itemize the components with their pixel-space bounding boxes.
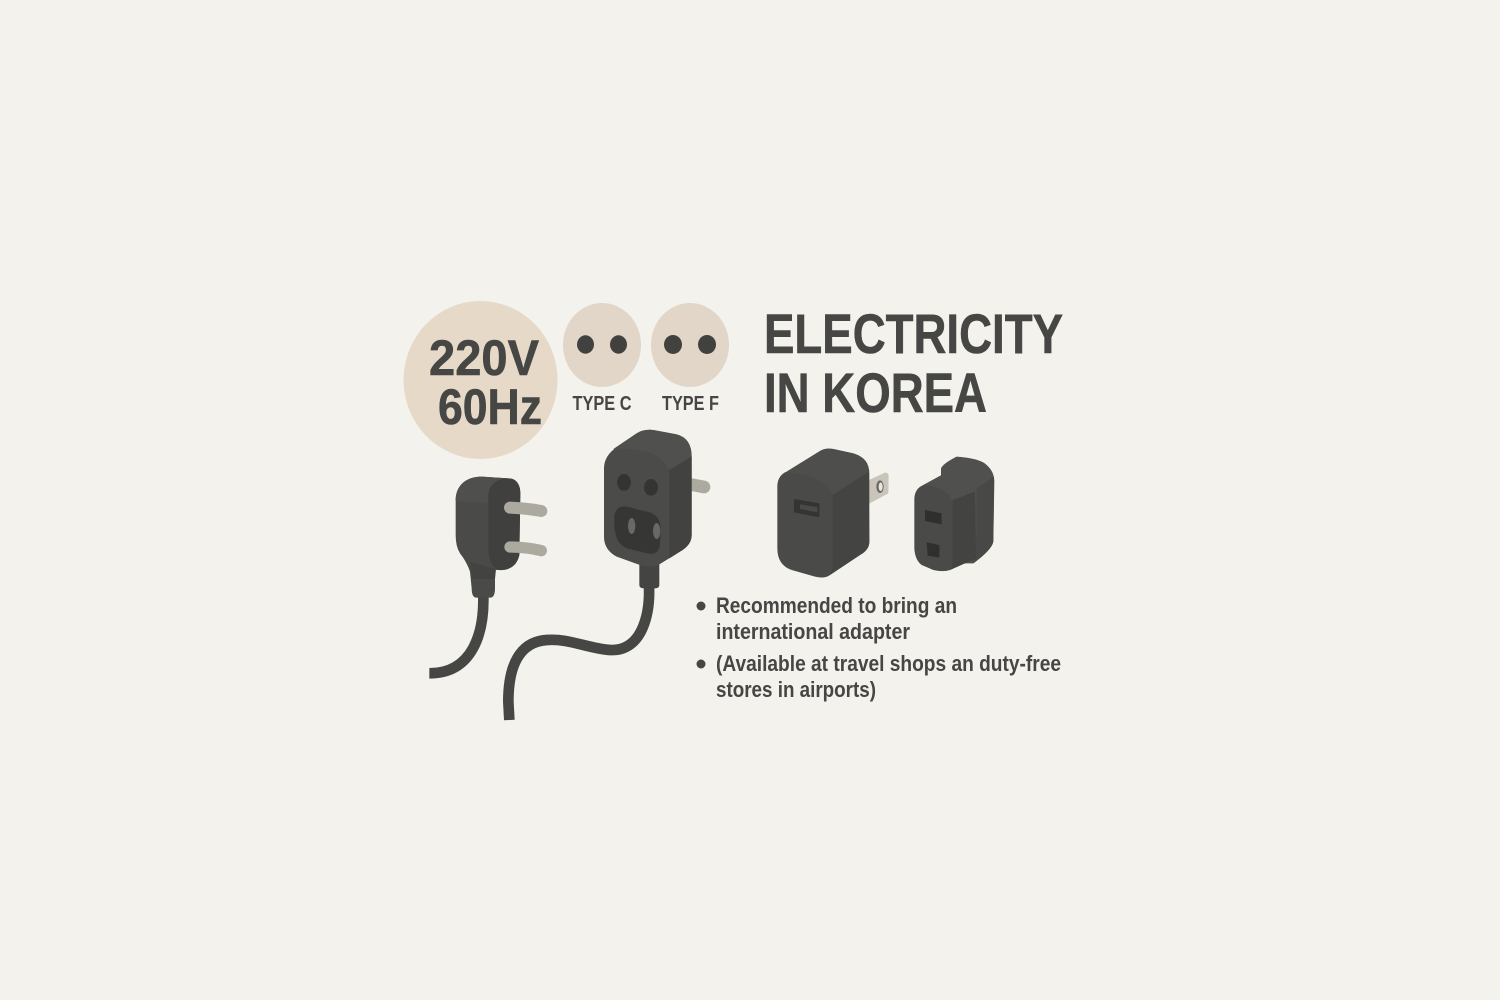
bullet list: adapter advice: international adapter: [716, 619, 910, 644]
bullet list: adapter advice: Recommended to bring an: [716, 593, 957, 618]
title: [764, 302, 1063, 424]
socket: type C: TYPE C: [572, 392, 632, 415]
bullet list: adapter advice: stores in airports): [716, 677, 876, 702]
socket: type C: [563, 303, 641, 415]
adapter: socket converter: [914, 457, 994, 571]
bullet list: adapter advice: (Available at travel shops an duty-free: [716, 651, 1061, 676]
plug with cord: center: [508, 430, 704, 720]
socket: type F: TYPE F: [662, 392, 719, 415]
badge: 220V 60Hz: 60Hz: [438, 379, 542, 435]
bullet list: adapter advice: [696, 593, 1061, 702]
badge: 220V 60Hz: [404, 301, 558, 459]
plug with cord: left: [429, 477, 541, 673]
title: ELECTRICITY: [764, 302, 1063, 365]
socket: type F: [651, 303, 729, 415]
title: IN KOREA: [764, 361, 987, 424]
adapter: USB wall charger: [777, 449, 889, 578]
badge: 220V 60Hz: 220V: [429, 330, 540, 386]
